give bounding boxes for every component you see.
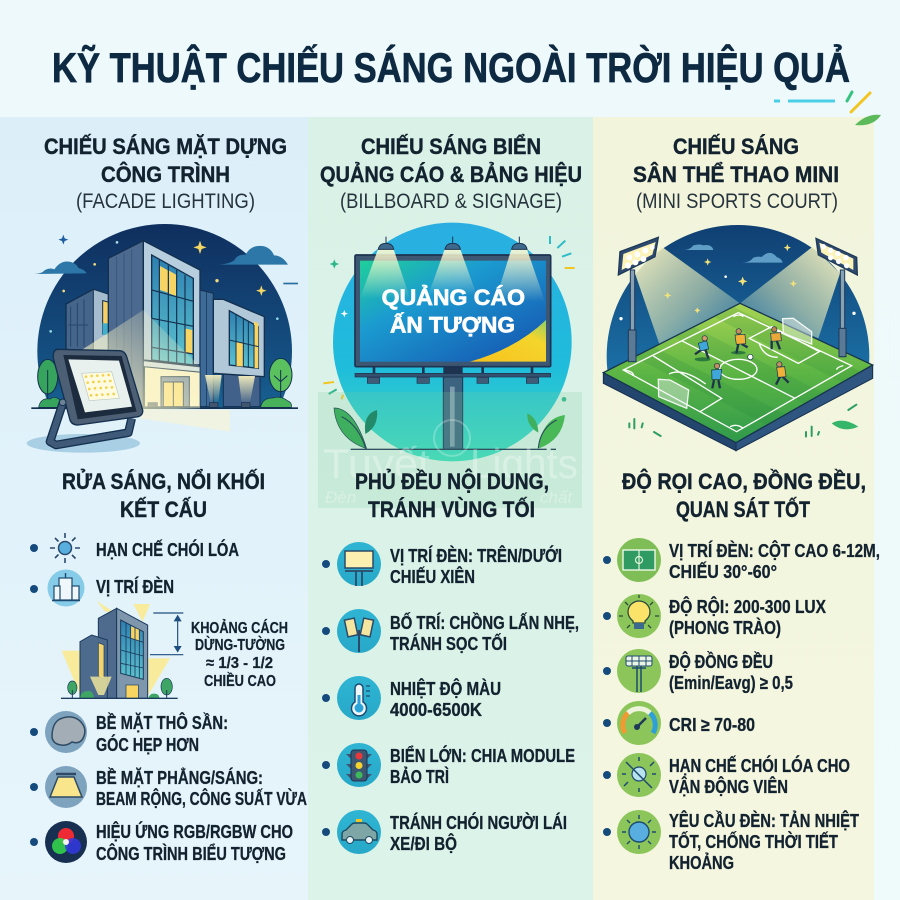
floodlight poles [618,237,857,362]
list item: uniformity: (Emin/Eavg) ≥ 0,5 [669,673,793,693]
watermark: chất [540,488,573,507]
list item: glare [30,533,239,563]
heading: sports court: CHIẾU SÁNG [673,134,799,159]
heading: facade: (FACADE LIGHTING) [76,190,255,213]
grass accents [629,405,856,437]
list item: uniformity [603,649,793,693]
list item: lamp position: VỊ TRÍ ĐÈN [96,576,174,597]
heading: billboard [320,134,582,213]
callout: distance note: KHOẢNG CÁCH [191,618,288,637]
wall washers [205,375,222,403]
subheading: billboard: TRÁNH VÙNG TỐI [368,496,535,522]
billboard screen: ẤN TƯỢNG [390,313,515,338]
list item: uniformity: ĐỘ ĐỒNG ĐỀU [669,651,773,672]
subheading: billboard [355,469,549,522]
list item: lamp position [603,538,880,582]
callout: distance note: ≈ 1/3 - 1/2 [206,655,273,672]
billboard screen: QUẢNG CÁO [382,285,525,310]
billboard screen [355,248,551,367]
subheading: facade: KẾT CẤU [120,497,207,522]
list item: illuminance [603,594,826,638]
heading: billboard: CHIẾU SÁNG BIỂN [361,134,541,159]
heading: sports court: (MINI SPORTS COURT) [636,190,838,213]
watermark: Lights [470,440,578,487]
list item: RGB effect: HIỆU ỨNG RGB/RGBW CHO [96,821,293,842]
list item: lamp position: CHIẾU XIÊN [390,566,475,587]
list item: lamp requirements [603,810,859,873]
left building [66,289,121,353]
list item: glare limit: VẬN ĐỘNG VIÊN [669,776,788,797]
list item: RGB effect [30,821,293,864]
structure [374,367,532,373]
heading: sports court [633,134,839,213]
list item: lamp position: VỊ TRÍ ĐÈN: TRÊN/DƯỚI [390,545,562,566]
heading: sports court: SÂN THỂ THAO MINI [633,162,839,187]
connector [200,290,213,407]
list item: lamp requirements: YÊU CẦU ĐÈN: TẢN NHIỆT [669,810,859,831]
list item: large signs: BẢO TRÌ [390,766,449,787]
list item: large signs: BIỂN LỚN: CHIA MODULE [390,745,575,766]
lamps [378,237,527,249]
list item: lamp position [322,542,562,587]
list item: layout [322,609,579,654]
right building [223,374,260,407]
main building [108,241,143,407]
pitch base [603,373,736,451]
list item: large signs [322,743,575,787]
panel: mini sports court [593,117,880,900]
heading: billboard: (BILLBOARD & SIGNAGE) [340,190,562,213]
list item: rough surface: GÓC HẸP HƠN [96,734,199,755]
heading: facade: CHIẾU SÁNG MẶT DỰNG [44,134,287,159]
callout: distance note [191,618,288,690]
heading: facade [44,134,287,213]
list item: illuminance: (PHONG TRÀO) [669,617,781,638]
illustration: billboard [323,223,575,461]
players [695,327,789,388]
subheading: sports court: QUAN SÁT TỐT [676,496,810,522]
list item: lamp requirements: KHOẢNG [669,852,734,873]
watermark: Đèn [325,488,356,507]
list item: smooth surface: BEAM RỘNG, CÔNG SUẤT VỪA [96,788,307,809]
list item: rough surface [30,711,228,755]
list item: CRI: CRI ≥ 70-80 [669,715,755,735]
illustration: floodlit pitch [602,225,874,452]
list item: smooth surface: BỀ MẶT PHẲNG/SÁNG: [96,767,263,788]
list item: avoid glare: TRÁNH CHÓI NGƯỜI LÁI [390,812,567,833]
list item: rough surface: BỀ MẶT THÔ SẦN: [96,712,228,733]
sparkle accents [550,236,571,257]
pitch lines [623,313,852,432]
watermark [318,392,582,508]
panel: facade lighting [0,117,308,900]
list item: glare limit: HẠN CHẾ CHÓI LÓA CHO [669,755,850,776]
goals [658,318,812,408]
subheading: facade [62,468,265,522]
list item: colour temperature: NHIỆT ĐỘ MÀU [390,678,501,699]
list item: avoid glare: XE/ĐI BỘ [390,833,457,854]
list item: layout: TRÁNH SỌC TỐI [390,633,507,654]
list item: colour temperature: 4000-6500K [390,700,482,720]
heading: billboard: QUẢNG CÁO & BẢNG HIỆU [320,162,582,187]
list item: CRI [603,701,755,745]
list item: glare: HẠN CHẾ CHÓI LÓA [96,539,239,560]
illustration: building with floodlight [26,224,298,453]
list item: layout: BỐ TRÍ: CHỒNG LẤN NHẸ, [390,612,579,633]
panel: billboard and signage [308,117,593,900]
list item: RGB effect: CÔNG TRÌNH BIỂU TƯỢNG [96,843,286,864]
subheading: billboard: PHỦ ĐỀU NỘI DUNG, [355,469,549,494]
floodlight [27,434,140,453]
list item: smooth surface [30,766,307,809]
list item: lamp requirements: TỐT, CHỐNG THỜI TIẾT [669,831,838,852]
decorative accent: title corner [774,92,881,125]
pitch surface [603,303,873,443]
subheading: sports court: ĐỘ RỌI CAO, ĐỒNG ĐỀU, [622,469,866,494]
diagram: lamp distance [61,601,183,699]
subheading: sports court [622,469,866,522]
subheading: facade: RỬA SÁNG, NỔI KHỐI [62,468,265,494]
list item: lamp position [30,570,174,606]
light beam [82,310,200,410]
list item: colour temperature [322,676,501,720]
list item: glare limit [603,753,850,797]
list item: avoid glare [322,810,567,854]
leaves [334,408,367,449]
callout: distance note: DỪNG-TƯỜNG [195,635,285,654]
heading: facade: CÔNG TRÌNH [101,162,230,187]
list item: lamp position: CHIẾU 30°-60° [669,561,777,582]
list item: illuminance: ĐỘ RỘI: 200-300 LUX [669,596,826,617]
trees [38,359,58,394]
watermark: Tuyết [323,440,430,487]
callout: distance note: CHIỀU CAO [204,671,276,690]
